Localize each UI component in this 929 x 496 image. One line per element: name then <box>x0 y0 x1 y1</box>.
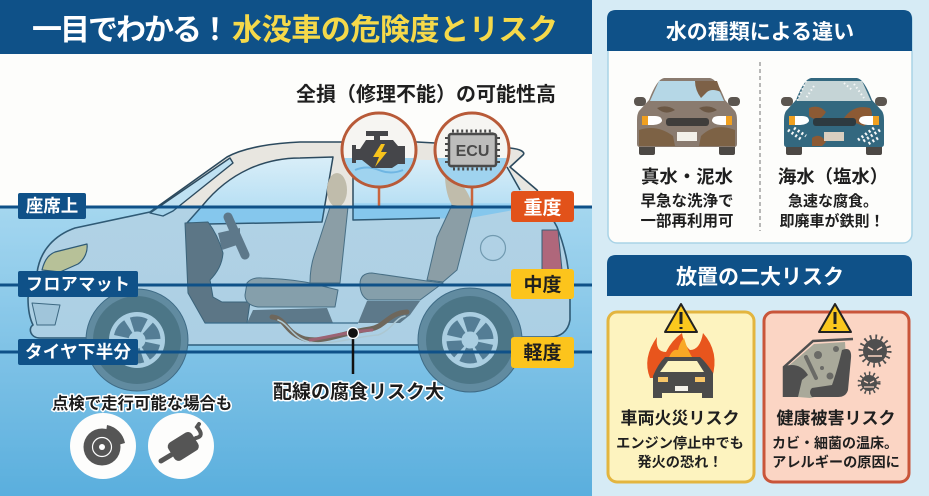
callout text: wiring corrosion: 配線の腐食リスク大 <box>273 381 444 403</box>
note text: may still be drivable: 点検で走行可能な場合も <box>52 394 232 413</box>
callout stems from damage icons <box>379 186 472 207</box>
text: fresh/muddy water: 真水・泥水 <box>641 166 734 187</box>
title bar: 水没車の危険度とリスク <box>232 14 558 47</box>
level label: floor mat <box>18 271 138 297</box>
text: health risk: 健康被害リスク <box>776 408 896 428</box>
text: fresh/muddy water: 一部再利用可 <box>640 212 734 230</box>
icon: warning triangle <box>665 304 697 332</box>
icon: muffler <box>148 413 214 479</box>
panel header: 放置の二大リスク <box>676 266 844 289</box>
severity badge: mild <box>511 337 574 368</box>
card: vehicle fire risk <box>608 304 754 482</box>
panel: flood depth diagram <box>0 54 592 496</box>
icon: small germ <box>860 374 878 392</box>
wiring harness <box>272 312 407 343</box>
severity badge: moderate <box>511 269 574 299</box>
text: health risk <box>772 408 900 471</box>
text: health risk: アレルギーの原因に <box>772 455 900 471</box>
panel header <box>607 10 912 51</box>
text: sea water: 海水（塩水） <box>778 166 888 187</box>
heading: total loss: 全損（修理不能）の可能性高 <box>296 83 556 106</box>
front wheel <box>86 289 188 391</box>
panel: two risks if left alone <box>607 255 912 482</box>
level label: lower half of tire: タイヤ下半分 <box>25 342 132 362</box>
severity badge: moderate: 中度 <box>523 274 562 296</box>
title bar: 一目でわかる！ <box>32 14 230 47</box>
text: fire risk: 発火の恐れ！ <box>637 454 723 471</box>
text: fresh/muddy water: 早急な洗浄で <box>640 191 734 210</box>
text: sea water: 急速な腐食。 <box>788 192 878 210</box>
panel: difference by water type <box>607 10 912 243</box>
text: fresh/muddy water <box>640 166 734 230</box>
text: fire risk: エンジン停止中でも <box>616 435 744 452</box>
car cutaway illustration <box>28 142 570 392</box>
severity badge: severe <box>511 191 574 222</box>
icon: moldy car interior <box>784 339 853 398</box>
level label: floor mat: フロアマット <box>26 275 130 294</box>
text: health risk: カビ・細菌の温床。 <box>772 435 898 451</box>
panel header: 水の種類による違い <box>666 21 854 44</box>
level label: seat: 座席上 <box>26 196 78 216</box>
title bar <box>0 0 592 54</box>
severity badge: mild: 軽度 <box>523 342 562 364</box>
icon: burning car <box>647 333 715 398</box>
panel: right column background <box>592 0 929 496</box>
icon: ECU chip in water: ECU <box>456 143 489 160</box>
icon: ECU chip in water <box>430 113 514 190</box>
callout: wiring corrosion pointer <box>348 328 358 374</box>
text: sea water: 即廃車が鉄則！ <box>779 212 885 230</box>
icon: brake disc <box>70 413 136 479</box>
car: sea water <box>781 78 887 155</box>
text: sea water <box>778 166 888 230</box>
rear wheel <box>418 288 522 392</box>
icon: large germ <box>862 338 888 364</box>
level label: seat <box>18 193 86 219</box>
level label: lower half of tire <box>18 339 138 365</box>
text: fire risk <box>616 409 744 471</box>
icon: warning triangle <box>819 304 851 332</box>
card: health damage risk <box>764 304 909 482</box>
car: fresh/muddy water <box>634 78 740 155</box>
water level lines <box>0 207 592 352</box>
text: fire risk: 車両火災リスク <box>620 409 740 428</box>
severity badge: severe: 重度 <box>523 197 562 219</box>
icon: engine in water <box>340 113 420 190</box>
panel header <box>607 255 912 296</box>
